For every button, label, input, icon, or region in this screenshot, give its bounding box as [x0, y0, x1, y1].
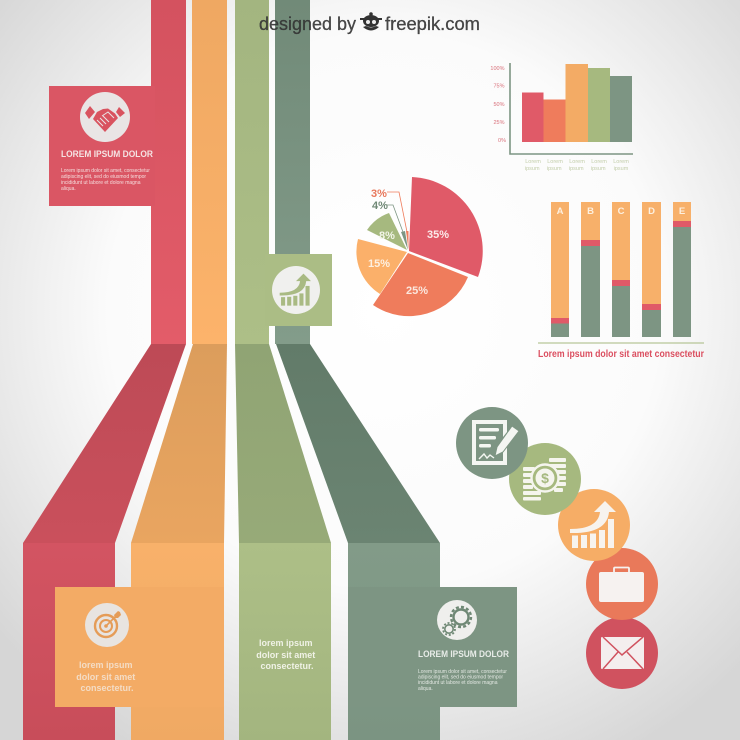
text block: green ribbon: dolor sit amet — [256, 650, 315, 660]
y-axis labels: 75% — [493, 84, 505, 90]
leader line: 4% — [387, 205, 403, 232]
logo: designed by freepik.com: freepik.com — [385, 14, 480, 34]
text block: lorem ipsum — [79, 660, 132, 670]
leader line: 3% — [387, 192, 407, 232]
label: 15%: 15% — [368, 258, 390, 270]
bar D — [642, 202, 661, 337]
x-axis labels: ipsum — [569, 166, 584, 172]
icon: gears — [437, 600, 477, 640]
y-axis labels: 0% — [498, 138, 506, 144]
body text: incididunt ut labore et dolore magna — [418, 680, 498, 686]
slice: 15% — [356, 239, 407, 294]
icon: target — [85, 603, 129, 647]
label: 4%: 4% — [372, 200, 388, 212]
ribbon: slate green — [275, 0, 440, 740]
label: 35%: 35% — [427, 229, 449, 241]
label: 25%: 25% — [406, 285, 428, 297]
icon: growth chart — [272, 266, 320, 314]
bar C: C — [618, 206, 625, 217]
bar D: D — [648, 206, 655, 217]
bar chart — [490, 63, 633, 172]
icon: coins circle: $ — [541, 470, 549, 486]
slice: 4% — [401, 231, 408, 250]
text block: green ribbon: consectetur. — [260, 661, 314, 671]
caption: Lorem ipsum dolor sit amet consectetur — [538, 349, 704, 360]
stacked bar chart — [538, 202, 704, 360]
slice: 35% — [409, 177, 483, 277]
bar B: B — [587, 206, 594, 217]
label: 8%: 8% — [379, 230, 395, 242]
logo: designed by freepik.com — [259, 12, 480, 34]
body text: incididunt ut labore et dolore magna — [61, 180, 141, 186]
bar B — [581, 202, 600, 337]
slice: 3% — [406, 231, 408, 250]
body text: Lorem ipsum dolor sit amet, consectetur — [61, 168, 150, 174]
icon: briefcase circle — [586, 548, 658, 620]
icon: handshake — [80, 92, 130, 142]
bar A — [551, 202, 569, 337]
icon: coins circle — [509, 443, 581, 515]
body text: adipiscing elit, sed do eiusmod tempor — [418, 674, 503, 680]
x-axis labels: Lorem — [591, 159, 607, 165]
text block: green ribbon: lorem ipsum — [259, 638, 312, 648]
slice: 25% — [373, 253, 468, 316]
bar E — [673, 202, 691, 337]
panel: orange target — [55, 587, 224, 707]
ribbon: red — [23, 0, 186, 740]
bar C — [612, 202, 630, 337]
body text: adipiscing elit, sed do eiusmod tempor — [61, 174, 146, 180]
panel: red partnership — [49, 86, 155, 206]
text block: dolor sit amet — [76, 672, 135, 682]
bars — [522, 64, 632, 142]
x-axis labels: Lorem — [525, 159, 541, 165]
body text: Lorem ipsum dolor sit amet, consectetur — [418, 669, 507, 675]
panel: slate gears — [348, 587, 517, 707]
icon: contract circle — [456, 407, 528, 479]
x-axis labels: ipsum — [525, 166, 540, 172]
y-axis labels: 100% — [490, 66, 505, 72]
bar A: A — [557, 206, 564, 217]
baseline — [538, 342, 704, 344]
x-axis labels: Lorem — [613, 159, 629, 165]
x-axis labels: ipsum — [591, 166, 606, 172]
ribbon: green — [235, 0, 331, 740]
bar E: E — [679, 206, 685, 217]
y-axis labels: 25% — [493, 120, 505, 126]
x-axis labels: Lorem — [547, 159, 563, 165]
axes — [510, 63, 633, 154]
icon: growth chart circle — [558, 489, 630, 561]
icon: mail circle — [586, 617, 658, 689]
heading: LOREM IPSUM DOLOR — [418, 649, 509, 659]
label: 3%: 3% — [371, 188, 387, 200]
x-axis labels: ipsum — [614, 166, 629, 172]
body text: aliqua. — [418, 686, 433, 692]
heading: LOREM IPSUM DOLOR — [61, 149, 153, 159]
x-axis labels: ipsum — [547, 166, 562, 172]
x-axis labels: Lorem — [569, 159, 585, 165]
icon: freepik robot — [360, 12, 382, 30]
ribbon: orange — [131, 0, 227, 740]
slice: 8% — [367, 213, 407, 250]
body text: aliqua. — [61, 186, 76, 192]
text block: consectetur. — [80, 683, 134, 693]
pie chart — [356, 177, 483, 316]
panel: green growth — [265, 254, 332, 326]
y-axis labels: 50% — [493, 102, 505, 108]
logo: designed by freepik.com: designed by — [259, 14, 356, 34]
